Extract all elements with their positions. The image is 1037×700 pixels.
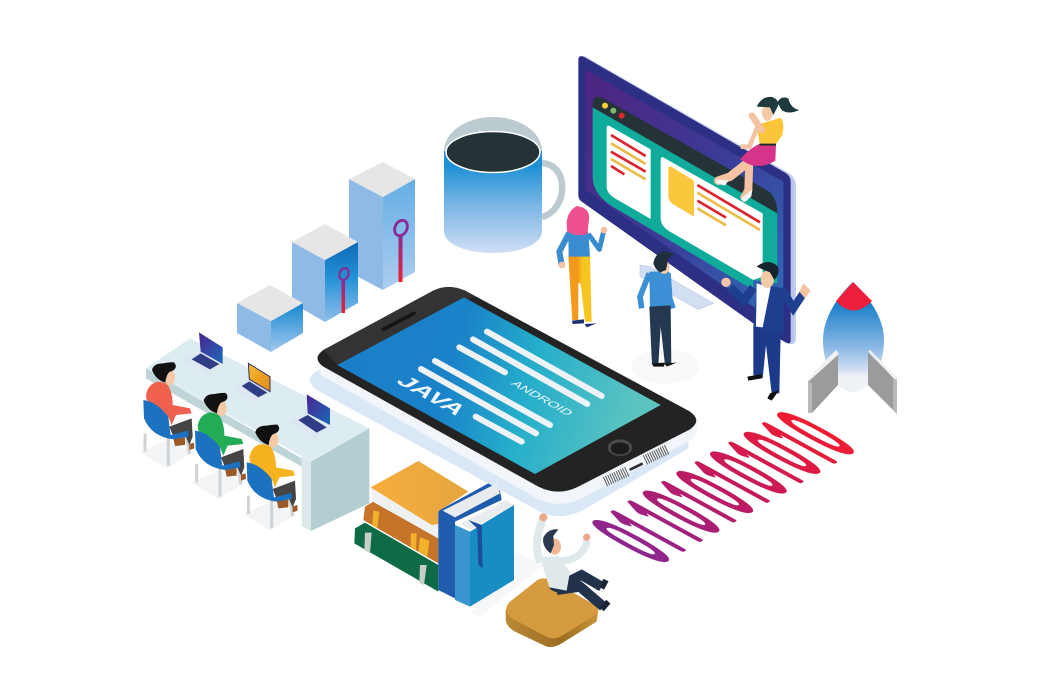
monitor with web page: [559, 56, 811, 401]
rocket: [808, 282, 898, 414]
orange book: [371, 461, 468, 538]
man in blue sweater: [631, 251, 699, 384]
right fin: [868, 350, 898, 414]
woman with pink hair: [559, 206, 607, 327]
man: [537, 513, 608, 609]
monitor frame: [578, 56, 791, 343]
bar chart: three isometric cubes: [237, 162, 415, 352]
right content card: [661, 157, 763, 280]
woman sitting on monitor: [716, 97, 799, 202]
bezel highlight: [323, 287, 475, 365]
rocket body: [823, 282, 884, 392]
man in suit: [721, 262, 811, 401]
monitor edge highlight: [583, 57, 795, 343]
brown book: [363, 502, 438, 563]
laptop 2: [233, 363, 270, 402]
code lines: [421, 332, 602, 442]
browser title bar: [593, 97, 777, 213]
stool: [506, 578, 598, 647]
earpiece: [383, 313, 414, 329]
left content card: [607, 126, 651, 219]
home button: [608, 439, 632, 456]
stack of books: [354, 461, 543, 617]
teal screen: [593, 107, 777, 290]
mug rim: [444, 117, 542, 151]
left fin: [808, 350, 839, 413]
developer in green shirt: [192, 393, 246, 499]
tall bar: [349, 162, 415, 290]
coffee mug: [444, 117, 562, 253]
developer in red shirt: [140, 362, 194, 468]
developer in yellow shirt: [243, 425, 298, 531]
mug handle: [542, 163, 562, 217]
laptop 1: [182, 332, 223, 375]
phone screen: [337, 297, 661, 474]
floor shadow: [470, 552, 543, 617]
label: ANDROID: ANDROID: [508, 379, 577, 417]
green book: [354, 523, 438, 592]
desk with laptops and developers: [140, 332, 369, 531]
speaker grills and port: [605, 449, 667, 482]
label: JAVA: JAVA: [391, 373, 472, 418]
smartphone with code screen: [310, 287, 697, 516]
phone side: [319, 358, 697, 504]
desk: [146, 338, 369, 531]
navy blue upright book: [438, 483, 502, 598]
window dots: [602, 103, 625, 119]
rocket nose: [836, 282, 872, 310]
mug body: [444, 150, 542, 253]
monitor bezel gradient: [586, 70, 783, 325]
medium bar: [292, 224, 358, 322]
monitor stand: [640, 265, 713, 309]
phone body: [317, 287, 696, 492]
laptop 3: [289, 394, 330, 437]
phone shadow: [310, 367, 688, 516]
small bar: [237, 285, 303, 352]
coffee: [446, 132, 540, 172]
man cheering on a stool: [506, 513, 608, 647]
binary digits strip: 011010101010: [579, 405, 873, 573]
light blue upright book: [455, 500, 514, 607]
